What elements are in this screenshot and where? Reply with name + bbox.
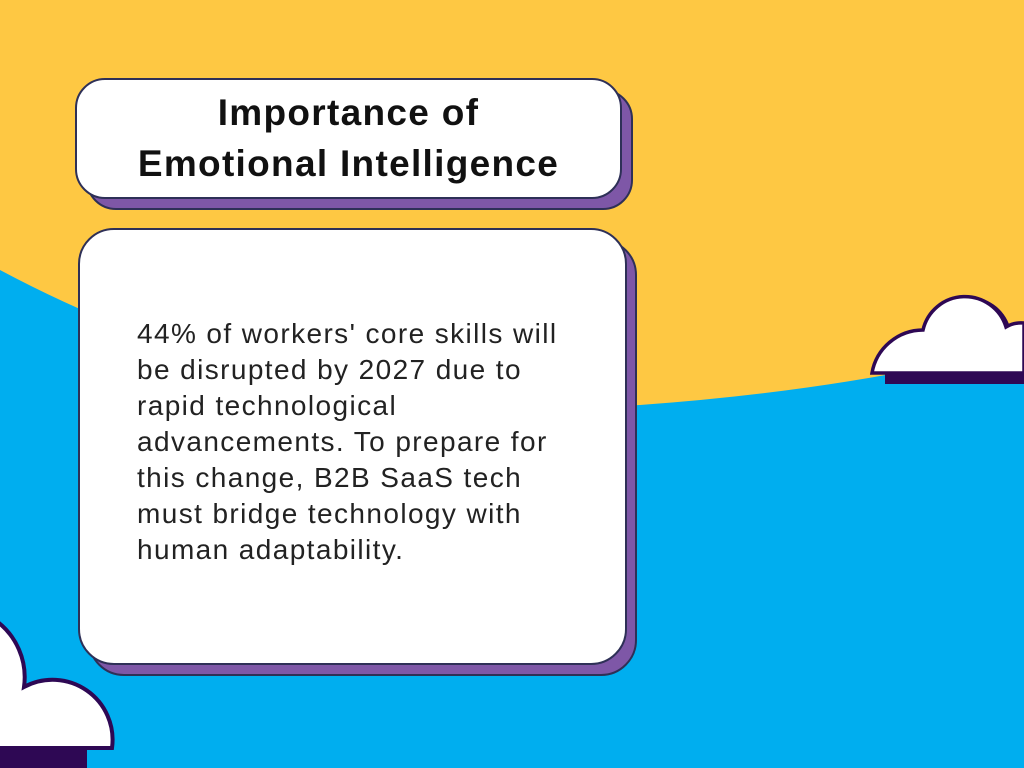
body text: 44% of workers' core skills will [137,318,557,349]
body text: be disrupted by 2027 due to [137,354,522,385]
body text: rapid technological [137,390,397,421]
title: Importance of [218,92,479,133]
body text [137,318,557,565]
body text: human adaptability. [137,534,404,565]
title panel [75,78,633,210]
panel: body text [78,228,637,676]
icon: right cloud [870,294,1024,384]
body text: must bridge technology with [137,498,522,529]
icon: bottom-left cloud [0,621,115,768]
title: Emotional Intelligence [138,143,559,184]
title [138,92,559,184]
body text: advancements. To prepare for [137,426,548,457]
body text: this change, B2B SaaS tech [137,462,522,493]
